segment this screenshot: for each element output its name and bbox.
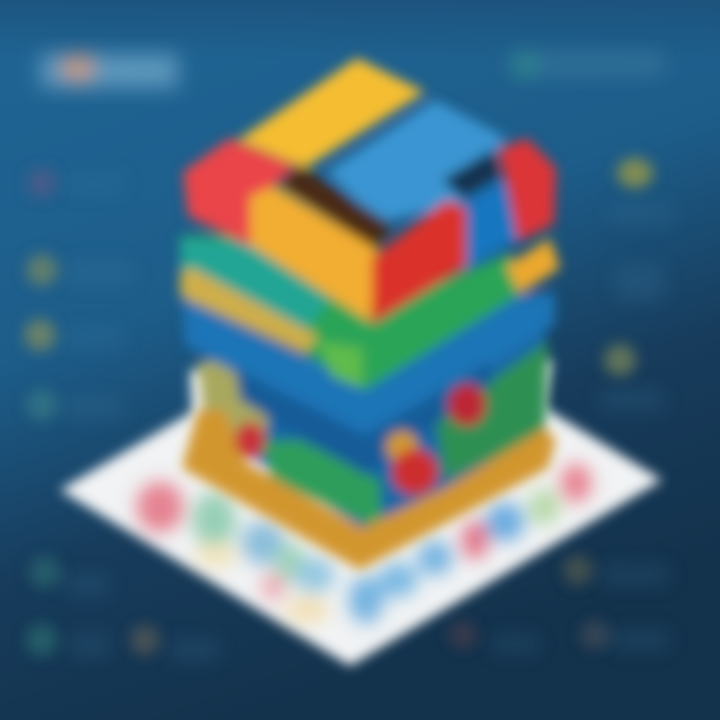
blue band	[183, 292, 555, 445]
top left red block	[183, 138, 296, 246]
lower dark blue core	[205, 320, 545, 530]
icon: lower teal marker two	[26, 624, 58, 656]
lime front highlight	[318, 342, 362, 388]
front yellow block	[250, 186, 378, 322]
header badge right	[510, 52, 665, 77]
icon: purple marker	[27, 168, 57, 198]
left column text blurs	[65, 175, 220, 660]
icon: yellow marker	[617, 158, 653, 188]
block tower	[180, 58, 560, 570]
right column icons	[449, 158, 653, 650]
orange base band	[182, 410, 556, 570]
red dot right	[448, 384, 486, 426]
sheet colour tiles	[136, 463, 592, 624]
white base sheet	[60, 360, 662, 666]
icon: teal marker	[26, 389, 58, 421]
green band	[180, 236, 518, 390]
right blue block	[460, 180, 518, 272]
left column icons	[24, 168, 160, 656]
red dot left	[235, 422, 265, 458]
top yellow block	[238, 58, 425, 168]
icon: brown marker	[563, 555, 593, 585]
icon: dim red marker	[449, 621, 477, 649]
dark brown gap	[280, 165, 392, 250]
icon: lower teal marker one	[29, 556, 61, 588]
icon: olive marker	[604, 344, 636, 376]
icon: olive marker one	[26, 254, 58, 286]
front red block	[372, 200, 466, 324]
right red block	[498, 138, 556, 242]
top blue base	[327, 100, 505, 222]
dark navy gap	[442, 150, 500, 198]
lower right green block	[435, 340, 548, 480]
right orange block	[506, 238, 560, 294]
red block front	[392, 449, 438, 495]
lower left yellow-green block	[198, 362, 268, 455]
orange dot front	[386, 431, 418, 463]
lower left green block	[262, 440, 382, 530]
yellow stripe	[180, 268, 318, 354]
right column text blurs	[490, 205, 675, 653]
teal left highlight	[180, 238, 330, 330]
icon: dim marker	[580, 620, 610, 650]
icon: olive marker two	[24, 319, 56, 351]
deep blue lower band	[235, 362, 490, 475]
header badge left	[40, 54, 178, 88]
icon: lower brown marker	[130, 625, 160, 655]
